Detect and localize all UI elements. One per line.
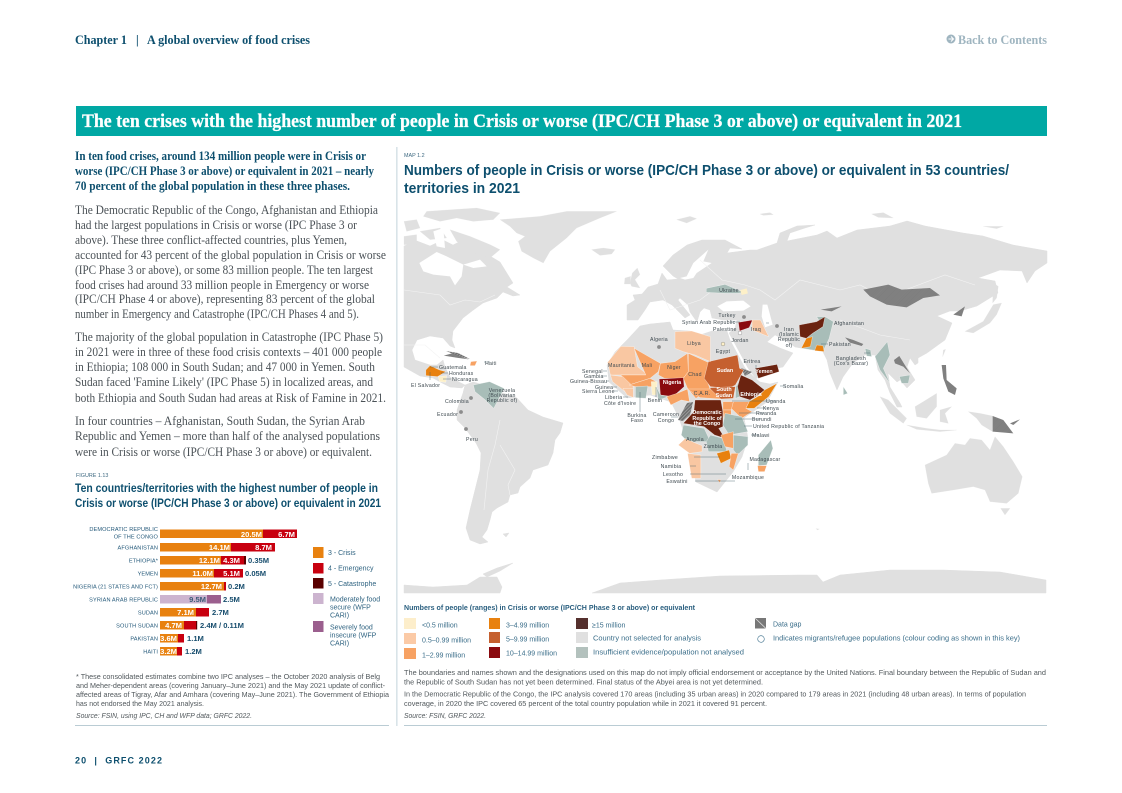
country labels: Cameroon — [653, 412, 679, 418]
page footer: 20 | GRFC 2022 — [75, 756, 162, 766]
title banner — [76, 106, 1047, 136]
intro text block: 70 percent of the global population in these three phases. — [75, 179, 350, 193]
bar values: 5.1M — [223, 569, 240, 578]
bars — [160, 530, 297, 656]
migrant and country markers — [459, 315, 779, 431]
country labels: Syrian Arab Republic — [682, 320, 736, 326]
figure label: FIGURE 1.13 — [76, 473, 108, 479]
bar values: 20.5M — [241, 530, 262, 539]
row labels — [73, 527, 159, 656]
body paragraph 1: food crises had around 33 million people in Emergency or worse — [75, 278, 369, 292]
bar values: 4.3M — [223, 556, 240, 565]
row labels: AFGHANISTAN — [118, 546, 158, 552]
country labels: Mali — [642, 363, 652, 369]
map notes — [404, 668, 1046, 720]
country labels: (Bolivarian — [488, 393, 516, 399]
map legend: 1–2.99 million — [422, 652, 465, 660]
country labels: (Islamic — [779, 332, 799, 338]
country labels: Republic of — [692, 416, 722, 422]
map legend: Insufficient evidence/population not analysed — [593, 650, 744, 656]
country labels: Sudan — [716, 393, 732, 399]
bar values: 1.2M — [185, 647, 202, 656]
country labels: Uganda — [766, 399, 786, 405]
row labels: SYRIAN ARAB REPUBLIC — [89, 598, 158, 604]
chart legend: CARI) — [330, 612, 349, 620]
intro text block: worse (IPC/CH Phase 3 or above) or equivalent in 2021 – nearly — [75, 164, 375, 178]
country labels — [411, 288, 868, 485]
map legend: 10–14.99 million — [506, 650, 557, 658]
country labels: Pakistan — [829, 342, 851, 348]
body paragraph 1: had the largest populations in Crisis or worse (IPC Phase 3 or — [75, 218, 357, 232]
country labels: Sierra Leone — [582, 389, 615, 395]
leader lines — [430, 322, 870, 481]
row labels: ETHIOPIA* — [129, 558, 159, 564]
country labels: Egypt — [716, 349, 731, 355]
chart footnote — [76, 672, 390, 720]
base land masses — [404, 208, 1047, 593]
map title: Numbers of people in Crisis or worse (IPC/CH Phase 3 or above) or equivalent in 53 countries/ — [404, 162, 1010, 179]
country labels: Venezuela — [489, 388, 515, 394]
country labels: Gambia — [584, 374, 604, 380]
country labels: Algeria — [650, 337, 668, 343]
country labels: Nicaragua — [452, 377, 478, 383]
bar values: 1.1M — [187, 634, 204, 643]
country labels: Jordan — [731, 338, 749, 344]
body paragraph 1 — [75, 203, 387, 321]
map legend: Numbers of people (ranges) in Crisis or worse (IPC/CH Phase 3 or above) or equivalent — [404, 605, 696, 612]
body paragraph 1: The Democratic Republic of the Congo, Afghanistan and Ethiopia — [75, 203, 378, 217]
country labels: Guatemala — [439, 365, 467, 371]
country labels: Eswatini — [666, 479, 688, 485]
body paragraph 2: both Ethiopia and South Sudan had areas at Risk of Famine in 2021. — [75, 391, 386, 405]
map title: territories in 2021 — [404, 180, 520, 197]
map label: MAP 1.2 — [404, 153, 425, 159]
chart legend: 5 - Catastrophe — [328, 581, 376, 588]
map legend: Indicates migrants/refugee populations (colour coding as shown in this key) — [773, 636, 1020, 642]
chart legend: insecure (WFP — [330, 632, 377, 640]
figure title — [75, 481, 381, 510]
bar values: 2.5M — [223, 595, 240, 604]
country labels: of) — [786, 343, 792, 349]
body paragraph 3 — [75, 414, 380, 459]
chart legend: Moderately food — [330, 596, 380, 604]
body paragraph 3: Republic and Yemen – more than half of the analysed populations — [75, 429, 380, 443]
country labels: Yemen — [755, 369, 773, 375]
bar values: 2.7M — [212, 608, 229, 617]
bar values: 12.7M — [201, 582, 222, 591]
chapter header: Chapter 1 | A global overview of food crises — [75, 33, 310, 47]
country labels: Iran — [784, 327, 794, 333]
bar values: 12.1M — [199, 556, 220, 565]
country labels: Iraq — [751, 327, 761, 333]
country labels: Eritrea — [743, 359, 761, 365]
country labels: Guinea-Bissau — [570, 379, 607, 385]
bar values: 3.2M — [160, 647, 177, 656]
country labels: Turkey — [718, 313, 736, 319]
bar values: 0.35M — [248, 556, 269, 565]
country labels: Ethiopia — [740, 392, 763, 398]
analysed countries — [426, 284, 833, 483]
chart footnote: and Meher-dependent areas (covering January–June 2021) and the May 2021 update of conflict- — [76, 681, 386, 690]
body paragraph 1: accounted for 43 percent of the global population in Crisis or worse — [75, 248, 387, 262]
title banner: The ten crises with the highest number of people in Crisis or worse (IPC/CH Phase 3 or above) or equivalent in 2021 — [82, 112, 962, 132]
intro text block: In ten food crises, around 134 million people were in Crisis or — [75, 149, 366, 163]
country labels: Ukraine — [719, 288, 739, 294]
country labels: Ecuador — [437, 412, 458, 418]
country labels: Guinea — [595, 385, 613, 391]
row labels: NIGERIA (21 STATES AND FCT) — [73, 584, 158, 590]
body paragraph 3: In four countries – Afghanistan, South Sudan, the Syrian Arab — [75, 414, 365, 428]
country labels: Honduras — [449, 371, 474, 377]
figure title: Ten countries/territories with the highest number of people in — [75, 481, 378, 495]
country labels: Peru — [466, 437, 478, 443]
hatched data gaps — [446, 285, 1020, 433]
bar values: 6.7M — [278, 530, 295, 539]
row labels: HAITI — [143, 650, 158, 656]
row labels: YEMEN — [138, 572, 158, 578]
body paragraph 1: number in Emergency and Catastrophe (IPC/CH Phases 4 and 5). — [75, 307, 359, 321]
row labels: DEMOCRATIC REPUBLIC — [89, 527, 158, 533]
body paragraph 2: The majority of the global population in Catastrophe (IPC Phase 5) — [75, 330, 383, 344]
country labels: Kenya — [763, 406, 779, 412]
map legend: 3–4.99 million — [506, 622, 549, 630]
map legend: Country not selected for analysis — [593, 636, 702, 642]
chart footnote: affected areas of Tigray, Afar and Amhara (covering May–June 2021). The Government of Ethiopia — [76, 690, 390, 699]
intro text block — [75, 149, 375, 193]
chart footnote: has not endorsed the May 2021 analysis. — [76, 699, 204, 708]
chart legend: 4 - Emergency — [328, 566, 374, 572]
country labels: Congo — [658, 418, 674, 424]
country labels: Zambia — [704, 444, 722, 450]
map legend: <0.5 million — [422, 622, 458, 630]
bar values: 11.0M — [192, 569, 213, 578]
country labels: Zimbabwe — [652, 455, 678, 461]
country labels: Niger — [667, 365, 681, 371]
country labels: (Cox's Bazar) — [834, 361, 868, 367]
row labels: SOUTH SUDAN — [116, 624, 158, 630]
chart footnote: Source: FSIN, using IPC, CH and WFP data; GRFC 2022. — [76, 711, 252, 720]
country labels: Palestine — [713, 327, 737, 333]
country labels: C.A.R. — [694, 391, 710, 397]
row labels: OF THE CONGO — [114, 534, 159, 540]
country labels: the Congo — [694, 421, 721, 427]
chart legend: secure (WFP — [330, 604, 371, 612]
country labels: Rwanda — [756, 411, 777, 417]
country labels: Côte d'Ivoire — [604, 401, 636, 407]
body paragraph 2: Sudan faced 'Famine Likely' (IPC Phase 5) in localized areas, and — [75, 375, 373, 389]
country labels: Chad — [688, 372, 702, 378]
chart legend: Severely food — [330, 624, 373, 632]
map legend: 5–9.99 million — [506, 636, 549, 644]
country labels: Mozambique — [732, 475, 764, 481]
bar values: 0.2M — [228, 582, 245, 591]
body paragraph 2 — [75, 330, 386, 405]
map notes: Source: FSIN, GRFC 2022. — [404, 711, 486, 720]
map notes: In the Democratic Republic of the Congo, the IPC analysis covered 170 areas (including 35 urban areas) in 2020 compared to 179 areas in 2021 (including 48 urban areas). In terms of population — [404, 690, 1026, 698]
figure title: Crisis or worse (IPC/CH Phase 3 or above) or equivalent in 2021 — [75, 496, 381, 510]
country labels: Benin — [648, 398, 662, 404]
country labels: Colombia — [445, 399, 469, 405]
world map — [404, 208, 1047, 593]
body paragraph 3: were in Crisis or worse (IPC/CH Phase 3 or above) or equivalent. — [75, 445, 372, 459]
body paragraph 1: above). These three conflict-affected countries, plus Yemen, — [75, 233, 347, 247]
country labels: Angola — [686, 437, 704, 443]
map legend — [404, 605, 1020, 660]
bar values: 4.7M — [165, 621, 182, 630]
country labels: Burundi — [752, 417, 772, 423]
country labels: Bangladesh — [836, 356, 866, 362]
map title — [404, 162, 1010, 197]
country labels: Democratic — [692, 410, 722, 416]
country labels: Faso — [631, 418, 643, 424]
country labels: United Republic of Tanzania — [753, 424, 824, 430]
country labels: Somalia — [783, 384, 804, 390]
faint borders — [404, 260, 975, 510]
country labels: Burkina — [627, 413, 647, 419]
map notes: the Republic of South Sudan has not yet been determined. Final status of the Abyei area is not yet determined. — [404, 678, 763, 686]
bar chart — [73, 527, 297, 656]
country labels: Namibia — [661, 464, 681, 470]
country labels: Sudan — [717, 368, 733, 374]
seas — [419, 228, 773, 327]
row labels: SUDAN — [138, 610, 158, 616]
bar values: 3.6M — [160, 634, 177, 643]
chart footnote: * These consolidated estimates combine two IPC analyses – the October 2020 analysis of Belg — [76, 672, 380, 681]
bar values: 8.7M — [255, 543, 272, 552]
body paragraph 1: (IPC/CH Phase 4 or above), representing 83 percent of the global — [75, 292, 376, 306]
map legend: 0.5–0.99 million — [422, 638, 471, 644]
bar values: 9.5M — [189, 595, 206, 604]
country labels: Republic — [778, 337, 800, 343]
map legend: Data gap — [773, 622, 802, 628]
map legend: ≥15 million — [592, 622, 626, 630]
body paragraph 2: in Ethiopia; 108 000 in South Sudan; and 47 000 in Yemen. South — [75, 360, 375, 374]
country labels: Republic of) — [487, 398, 517, 404]
country labels: Senegal — [582, 369, 603, 375]
bar values — [160, 530, 295, 656]
body paragraph 1: (IPC Phase 3 or above), or some 83 million people. The ten largest — [75, 263, 374, 277]
country labels: Nigeria — [663, 380, 682, 386]
country labels: Haiti — [485, 361, 497, 367]
country labels: Liberia — [605, 395, 622, 401]
country labels: Mauritania — [608, 363, 635, 369]
map notes: The boundaries and names shown and the designations used on this map do not imply official endorsement or acceptance by the United Nations. Final boundary between the Republic of Sudan and — [404, 668, 1046, 677]
body paragraph 2: in 2021 were in three of these food crisis contexts – 401 000 people — [75, 345, 382, 359]
row labels: PAKISTAN — [130, 636, 158, 642]
country labels: Lesotho — [663, 472, 683, 478]
bar values: 0.05M — [245, 569, 266, 578]
country labels: El Salvador — [411, 383, 440, 389]
bar values: 14.1M — [209, 543, 230, 552]
back to contents link: Back to Contents — [958, 33, 1047, 47]
bar values: 2.4M / 0.11M — [200, 621, 244, 630]
map notes: coverage, in 2020 the IPC covered 65 percent of the total country population while in 2021 it covered 91 percent. — [404, 699, 767, 708]
country labels: Malawi — [752, 433, 770, 439]
country labels: Libya — [687, 341, 701, 347]
country labels: South — [716, 387, 732, 393]
chart legend — [313, 547, 380, 648]
country labels: Madagascar — [749, 457, 781, 463]
bar values: 7.1M — [177, 608, 194, 617]
country labels: Afghanistan — [834, 321, 864, 327]
chart legend: 3 - Crisis — [328, 550, 356, 557]
chart legend: CARI) — [330, 640, 349, 648]
